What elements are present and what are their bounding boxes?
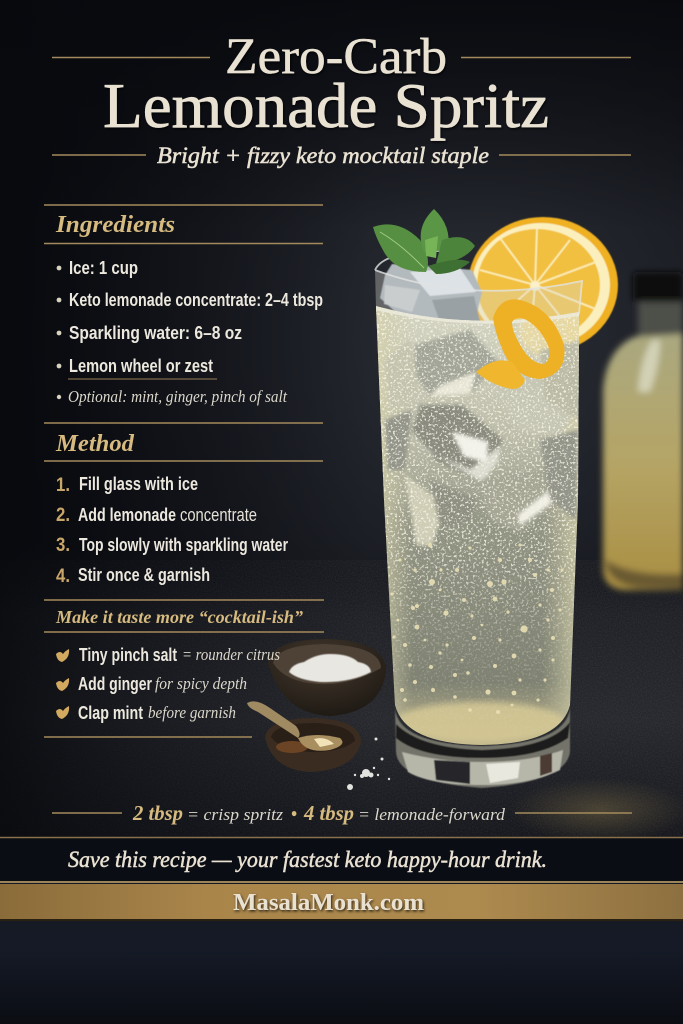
tips list: for spicy depth	[155, 674, 247, 693]
method steps: 2.	[56, 505, 70, 526]
method steps: Stir once & garnish	[78, 565, 210, 585]
method steps: Add lemonade	[78, 505, 176, 525]
method steps: 3.	[56, 535, 70, 556]
ingredient list: Keto lemonade concentrate: 2–4 tbsp	[69, 290, 323, 310]
subtitle: Bright + fizzy keto mocktail staple	[157, 143, 489, 168]
ratio note: 4 tbsp	[303, 801, 354, 825]
ingredient list	[57, 258, 323, 406]
tips list: before garnish	[148, 703, 236, 722]
salt bowl	[268, 639, 386, 716]
bubbles	[390, 543, 564, 714]
icon: check marks	[56, 649, 69, 719]
fizz texture	[376, 308, 579, 712]
bottle in background	[603, 272, 683, 590]
tips list	[56, 645, 280, 723]
ingredient list: Optional: mint, ginger, pinch of salt	[68, 387, 288, 406]
lemon wheel	[468, 217, 618, 353]
panel: ingredients	[44, 205, 323, 406]
glass of lemonade	[370, 250, 586, 788]
tips list: Clap mint	[78, 703, 143, 723]
title line 2: Lemonade Spritz	[103, 71, 549, 141]
ratio note: = lemonade-forward	[358, 805, 506, 824]
glass rim	[375, 250, 582, 314]
ingredient list: Lemon wheel or zest	[69, 356, 213, 376]
call to action band: Save this recipe — your fastest keto happy-hour drink.	[68, 847, 547, 872]
ingredient list: Ice: 1 cup	[69, 258, 138, 278]
glass upper wall	[375, 270, 582, 323]
ice above the liquid	[380, 264, 482, 322]
mint sprig	[373, 209, 475, 274]
panel: cocktail-ish tips	[44, 600, 324, 737]
method steps: 1.	[56, 475, 70, 496]
tips list: = rounder citrus	[182, 645, 280, 664]
tips list: Add ginger	[78, 674, 152, 694]
ingredient list: Sparkling water: 6–8 oz	[69, 323, 242, 343]
method steps: 4.	[56, 566, 70, 587]
tips list: Tiny pinch salt	[79, 645, 177, 665]
method steps: concentrate	[180, 505, 257, 525]
ratio note: 2 tbsp	[132, 801, 183, 825]
method steps: Top slowly with sparkling water	[79, 535, 288, 555]
ice cubes	[385, 330, 582, 546]
title line 1: Zero-Carb	[225, 29, 447, 85]
call to action band	[0, 838, 683, 882]
ratio note: •	[291, 804, 297, 825]
heading: make it taste more cocktail-ish: Make it taste more “cocktail-ish”	[55, 607, 303, 627]
ratio note: = crisp spritz	[187, 805, 283, 824]
heading: ingredients: Ingredients	[55, 212, 175, 238]
method steps	[56, 474, 288, 587]
website banner	[0, 884, 683, 921]
froth	[376, 308, 579, 322]
lemon peel curl	[476, 299, 564, 389]
spice bowl	[265, 718, 361, 772]
glass base	[395, 708, 570, 788]
website banner: MasalaMonk.com	[233, 890, 424, 916]
liquid	[370, 300, 586, 750]
spilled salt	[347, 738, 390, 790]
spoon	[247, 701, 342, 751]
ratio note	[52, 801, 632, 825]
heading: method: Method	[55, 431, 135, 457]
title block	[52, 29, 631, 168]
method steps: Fill glass with ice	[79, 474, 198, 494]
panel: method	[44, 423, 323, 587]
